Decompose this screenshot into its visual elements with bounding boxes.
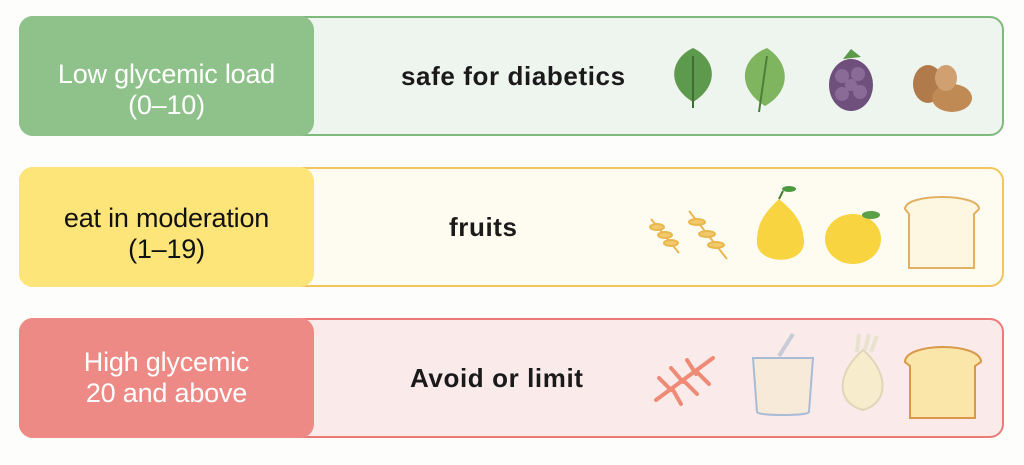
label: eat in moderation (19, 167, 314, 287)
panel: high glycemic row (19, 318, 1004, 438)
label: high glycemic (19, 318, 314, 438)
label: high glycemic: High glycemic (84, 347, 249, 377)
icons: wheat, pear, lemon, bread (649, 186, 980, 269)
text: avoid or limit: Avoid or limit (410, 362, 584, 392)
label: eat in moderation: (1–19) (128, 234, 205, 264)
panel: moderation row (19, 167, 1004, 287)
icons: grain, drink, dumpling, bread (654, 333, 982, 419)
panel: low glycemic row (19, 16, 1004, 136)
icons: leaves, berry, nuts (674, 48, 972, 112)
text: safe for diabetics: safe for diabetics (401, 60, 626, 90)
text: fruits: fruits (449, 212, 518, 242)
label: low glycemic load (19, 16, 314, 136)
label: high glycemic: 20 and above (86, 378, 247, 408)
label: eat in moderation: eat in moderation (64, 203, 269, 233)
label: low glycemic load: (0–10) (128, 90, 205, 120)
label: low glycemic load: Low glycemic load (58, 59, 275, 89)
